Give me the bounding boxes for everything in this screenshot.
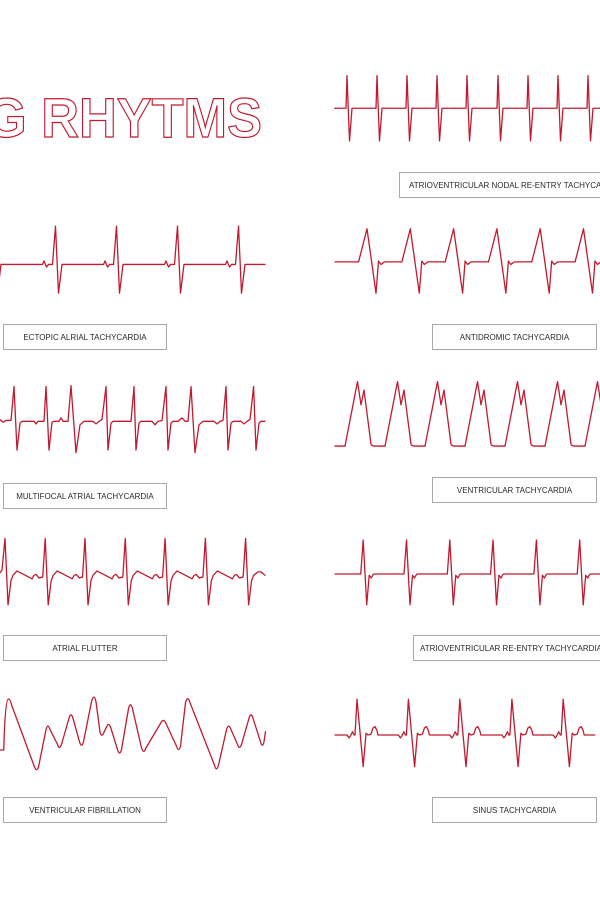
label: antidromic tachycardia: ANTIDROMIC TACHYCARDIA <box>460 333 570 342</box>
label: ventricular fibrillation: VENTRICULAR FIBRILLATION <box>29 806 141 815</box>
label: AV re-entry tachycardia <box>414 636 600 660</box>
label: sinus tachycardia: SINUS TACHYCARDIA <box>473 806 557 815</box>
label: ectopic atrial tachycardia <box>4 324 166 350</box>
label: atrial flutter: ATRIAL FLUTTER <box>52 644 118 653</box>
label: ventricular tachycardia: VENTRICULAR TACHYCARDIA <box>457 486 573 495</box>
waveform: atrial flutter <box>0 538 265 605</box>
label: AV nodal re-entry tachycardia <box>400 172 600 198</box>
label: ventricular tachycardia <box>432 478 596 502</box>
waveform: antidromic tachycardia <box>335 229 600 293</box>
waveform: ectopic atrial tachycardia <box>0 226 265 293</box>
waveform: ventricular fibrillation <box>0 697 266 770</box>
waveform: multifocal atrial tachycardia <box>0 386 265 453</box>
label: AV re-entry tachycardia: ATRIOVENTRICULAR RE-ENTRY TACHYCARDIA <box>420 644 600 653</box>
waveform: AV re-entry tachycardia <box>335 540 600 605</box>
label: multifocal atrial tachycardia <box>4 484 166 508</box>
label: sinus tachycardia <box>432 798 596 822</box>
label: ventricular fibrillation <box>4 798 166 822</box>
label: multifocal atrial tachycardia: MULTIFOCAL ATRIAL TACHYCARDIA <box>16 492 154 501</box>
label: ectopic atrial tachycardia: ECTOPIC ALRIAL TACHYCARDIA <box>23 333 147 342</box>
waveform: sinus tachycardia <box>335 699 595 767</box>
waveform: AV nodal re-entry tachycardia <box>335 76 600 141</box>
waveform: ventricular tachycardia <box>335 382 600 446</box>
label: antidromic tachycardia <box>432 324 596 350</box>
label: atrial flutter <box>4 636 166 660</box>
